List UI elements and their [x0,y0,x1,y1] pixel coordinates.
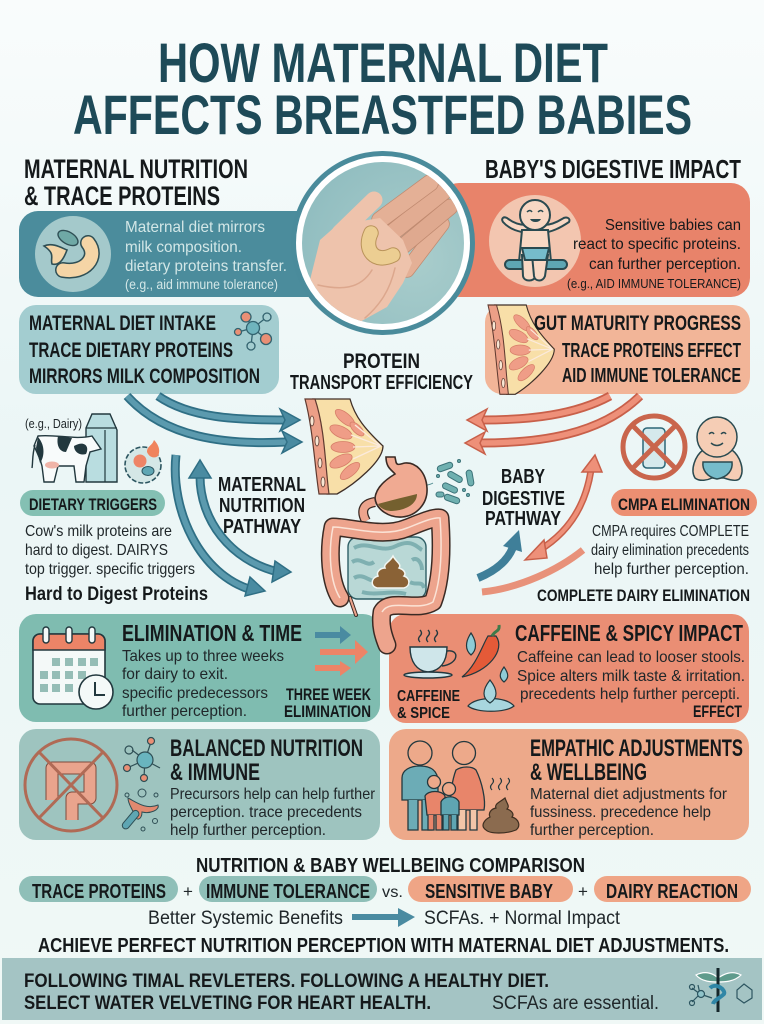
arrow: baby side to breast upper [467,396,610,431]
text: CMPA elimination [537,523,750,605]
panel: baby's digestive impact [440,183,750,297]
benefits line with arrow: Better Systemic Benefits [148,908,343,929]
heading: maternal nutrition: & TRACE PROTEINS [24,181,220,211]
icon: coffee cup [404,630,456,678]
icon: baby with diaper [489,195,581,287]
label: caffeine and spice [397,688,460,722]
footer text: SELECT WATER VELVETING FOR HEART HEALTH. [24,993,431,1014]
text: caffeine and spicy impact: precedents help further percepti. [520,686,740,703]
text: baby summary: (e.g., AID IMMUNE TOLERANCE) [567,276,741,291]
panel: empathic adjustments and wellbeing [389,729,749,840]
panel: maternal nutrition [19,211,329,297]
icon: cow and milk carton [25,414,117,482]
icon: three arrows [315,626,368,676]
heading: maternal nutrition [24,154,248,211]
title [73,31,692,146]
icon: inflamed cell [125,440,161,483]
text: balanced nutrition: Precursors help can help further [170,786,376,803]
label: baby digestive pathway [482,466,565,530]
text: elimination and time: ELIMINATION & TIME [122,620,302,646]
icon: cow and milk carton: (e.g., Dairy) [25,417,82,431]
text: dietary triggers: hard to digest. DAIRYS [25,542,168,559]
label: caffeine and spice: & SPICE [397,705,450,722]
comparison row: SENSITIVE BABY [425,881,554,903]
panel: maternal diet intake: MIRRORS MILK COMPOSITION [29,364,260,388]
panel: maternal diet intake: TRACE DIETARY PROTEINS [29,338,233,362]
text: balanced nutrition [170,735,376,839]
footer band [2,958,762,1020]
panel: maternal diet intake: MATERNAL DIET INTAKE [29,311,216,335]
icon: calendar and clock [33,627,113,709]
heading: maternal nutrition: MATERNAL NUTRITION [24,154,248,184]
text: maternal summary: dietary proteins transfer. [125,258,287,275]
arrow: baby side to breast lower [465,396,640,454]
panel: balanced nutrition and immune [19,729,380,840]
label: three week elimination [284,686,371,721]
text: elimination and time: Takes up to three weeks [122,648,284,665]
arrow: blue upward [478,530,522,578]
text: elimination and time: specific predecessors [122,685,268,702]
label: baby digestive pathway: DIGESTIVE [482,488,565,510]
label: maternal nutrition pathway [218,474,306,538]
text: balanced nutrition: & IMMUNE [170,759,260,786]
comparison row: vs. [382,884,403,901]
icon: happy baby [693,417,742,480]
icon: gut bacteria [413,460,474,505]
arrow: maternal to breast lower [127,396,302,453]
arrow: maternal to breast upper [158,396,300,431]
text: maternal summary: Maternal diet mirrors [125,219,265,236]
label: three week elimination: ELIMINATION [284,703,371,721]
text: empathic adjustments: & WELLBEING [530,759,647,786]
text: baby summary: react to specific proteins. [573,236,741,253]
label: baby digestive pathway: PATHWAY [485,508,562,530]
pill: dietary triggers [20,490,165,516]
benefits line with arrow: SCFAs. + Normal Impact [424,908,621,929]
icon: molecule [124,738,160,782]
text: elimination and time: for dairy to exit. [122,666,228,683]
text: maternal summary: milk composition. [125,239,242,256]
text: caffeine and spicy impact: EFFECT [693,703,742,721]
text: caffeine and spicy impact: Spice alters milk taste & irritation. [517,668,745,685]
icon: cashew [35,216,111,292]
icon: chili and drops [462,625,514,711]
heading: comparison: NUTRITION & BABY WELLBEING COMPARISON [196,854,585,877]
icon: crossed-out intestine [25,739,117,831]
text: empathic adjustments: fussiness. precedence help [530,804,711,821]
photo: hand holding cashew [291,151,475,335]
text: balanced nutrition: help further perception. [170,822,326,839]
text: elimination and time [122,620,302,720]
label: protein transport efficiency: TRANSPORT EFFICIENCY [290,372,473,394]
text: balanced nutrition: perception. trace precedents [170,804,362,821]
arrow: maternal pathway inner [189,460,291,582]
footer text: SCFAs are essential. [492,993,659,1014]
text: balanced nutrition: BALANCED NUTRITION [170,735,363,762]
text: dietary triggers: Hard to Digest Proteins [25,584,208,605]
icon: caduceus and molecules [690,968,752,1012]
icon: stool [483,778,519,833]
arrow: orange lower [482,550,583,592]
text: caffeine and spicy impact [515,620,745,721]
text: empathic adjustments [530,735,743,839]
label: caffeine and spice: CAFFEINE [397,688,460,705]
icon: family [402,741,485,830]
text: dietary triggers [25,523,208,605]
panel: gut maturity progress [485,305,750,394]
text: elimination and time: further perception. [122,703,247,720]
text: baby summary [567,217,741,291]
comparison row [19,876,751,903]
text: caffeine and spicy impact: Caffeine can lead to looser stools. [517,649,745,666]
text: baby summary: can further perception. [589,256,741,273]
text: dietary triggers: top trigger. specific triggers [25,561,195,578]
arrow: maternal pathway outer [175,455,265,596]
comparison row: + [578,882,588,901]
text: maternal summary: (e.g., aid immune tolerance) [125,277,278,292]
illustration: digestive tract [330,457,441,645]
text: baby summary: Sensitive babies can [605,217,741,234]
panel: maternal diet intake [19,305,279,394]
comparison row: TRACE PROTEINS [32,881,166,903]
icon: breast cross-section [488,305,554,394]
pill: dietary triggers: DIETARY TRIGGERS [29,496,157,514]
text: maternal summary [125,219,287,292]
comparison row: + [183,882,193,901]
text: dietary triggers: Cow's milk proteins are [25,523,172,540]
benefits line with arrow [148,908,621,929]
pill: CMPA elimination [611,489,757,516]
title: HOW MATERNAL DIET [158,31,608,94]
footer text [24,971,659,1014]
comparison row: IMMUNE TOLERANCE [206,881,370,903]
label: protein transport efficiency: PROTEIN [343,350,420,373]
label: maternal nutrition pathway: PATHWAY [223,516,302,538]
label: maternal nutrition pathway: NUTRITION [219,495,305,517]
icon: no dairy [623,416,685,478]
panel: elimination and time [19,614,380,722]
text: CMPA elimination: help further perception. [594,561,749,578]
label: protein transport efficiency [290,350,473,394]
panel: caffeine and spicy impact [389,614,749,723]
label: three week elimination: THREE WEEK [286,686,371,704]
text: empathic adjustments: further perception. [530,822,654,839]
icon: bacteria [121,789,158,831]
icon: molecule [234,312,272,350]
illustration: breast [305,399,383,494]
text: empathic adjustments: Maternal diet adjustments for [530,786,728,803]
footer text: FOLLOWING TIMAL REVLETERS. FOLLOWING A HEALTHY DIET. [24,971,549,992]
label: maternal nutrition pathway: MATERNAL [218,474,306,496]
arrow: baby pathway double-headed [525,455,602,560]
label: baby digestive pathway: BABY [501,466,546,488]
